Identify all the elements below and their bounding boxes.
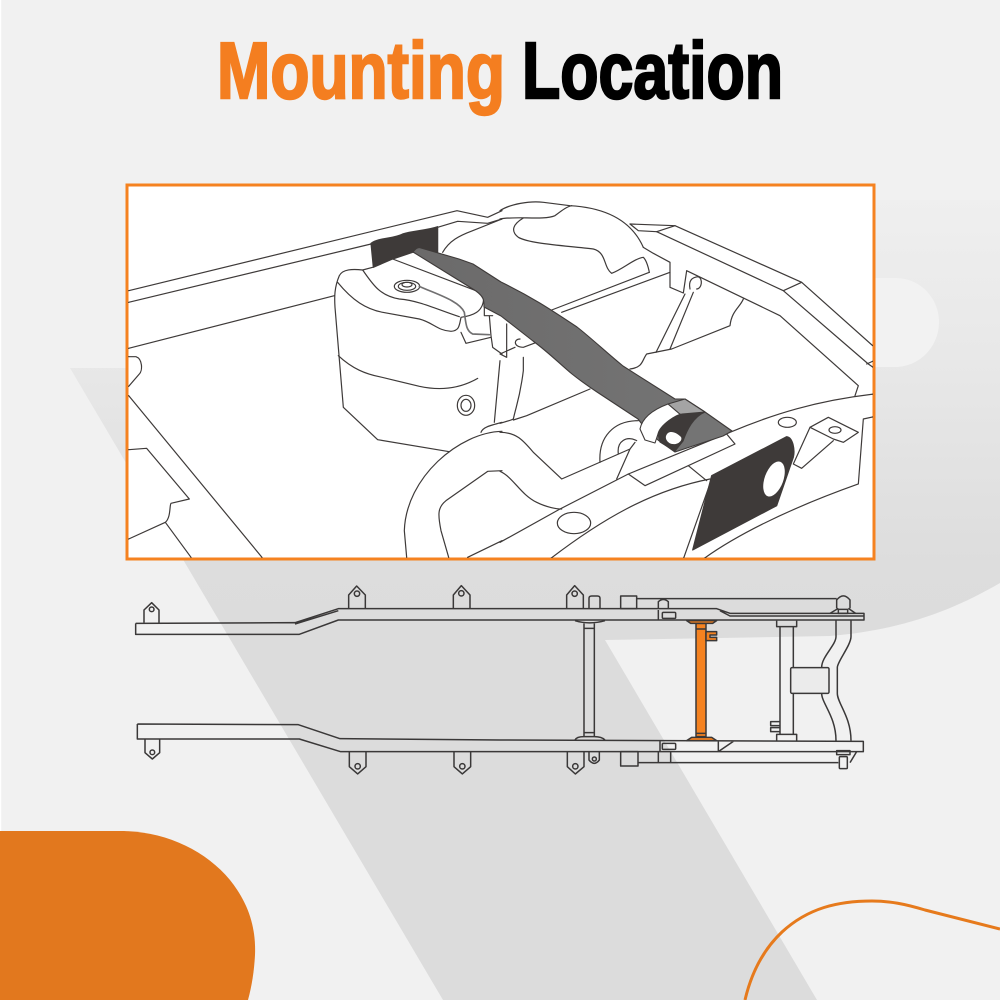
wheel arch: [404, 431, 502, 557]
title: [217, 26, 783, 115]
lower rail, left: [137, 724, 500, 752]
strap clamp: white loop: [640, 404, 682, 443]
panel: mounting detail illustration: [127, 185, 874, 559]
crossmember 2: highlighted in orange: [687, 621, 717, 741]
right part of frame with crossmembers: [500, 586, 864, 774]
left part of frame rails: [136, 586, 500, 774]
decorative orange curve: [745, 901, 1000, 1000]
black plate with hole: [693, 437, 794, 550]
right half line drawing: frame and crossmember: [500, 202, 874, 559]
upper mounting tabs: [144, 586, 470, 623]
strap clamp: light collar: [668, 399, 705, 416]
lower rail, right: [500, 740, 863, 752]
black bracket patch: [371, 227, 438, 267]
chassis frame diagram, top view: [136, 586, 864, 774]
crossmember 1: [575, 621, 605, 740]
upper rail, left: [136, 609, 500, 634]
title word: Mounting: Mounting: [217, 26, 505, 115]
strap clamp: eyelet hole: [666, 432, 681, 444]
strap clamp: black eyelet: [658, 412, 705, 451]
crossmember 3: [771, 621, 797, 741]
title word: Location: Location: [522, 26, 783, 115]
left floor details: [129, 357, 142, 386]
crossmember bracket: [791, 668, 829, 693]
fuel tank: [335, 267, 449, 452]
left half line drawing: frame rail and fuel tank: [129, 211, 502, 557]
upper rail, right: [500, 609, 864, 620]
strap: highlighted crossmember band: [413, 248, 732, 452]
lower mounting tabs: [145, 739, 471, 774]
filler cap: [394, 280, 420, 292]
S-shaped bars: [822, 620, 851, 741]
decorative orange blob: [0, 831, 255, 1000]
